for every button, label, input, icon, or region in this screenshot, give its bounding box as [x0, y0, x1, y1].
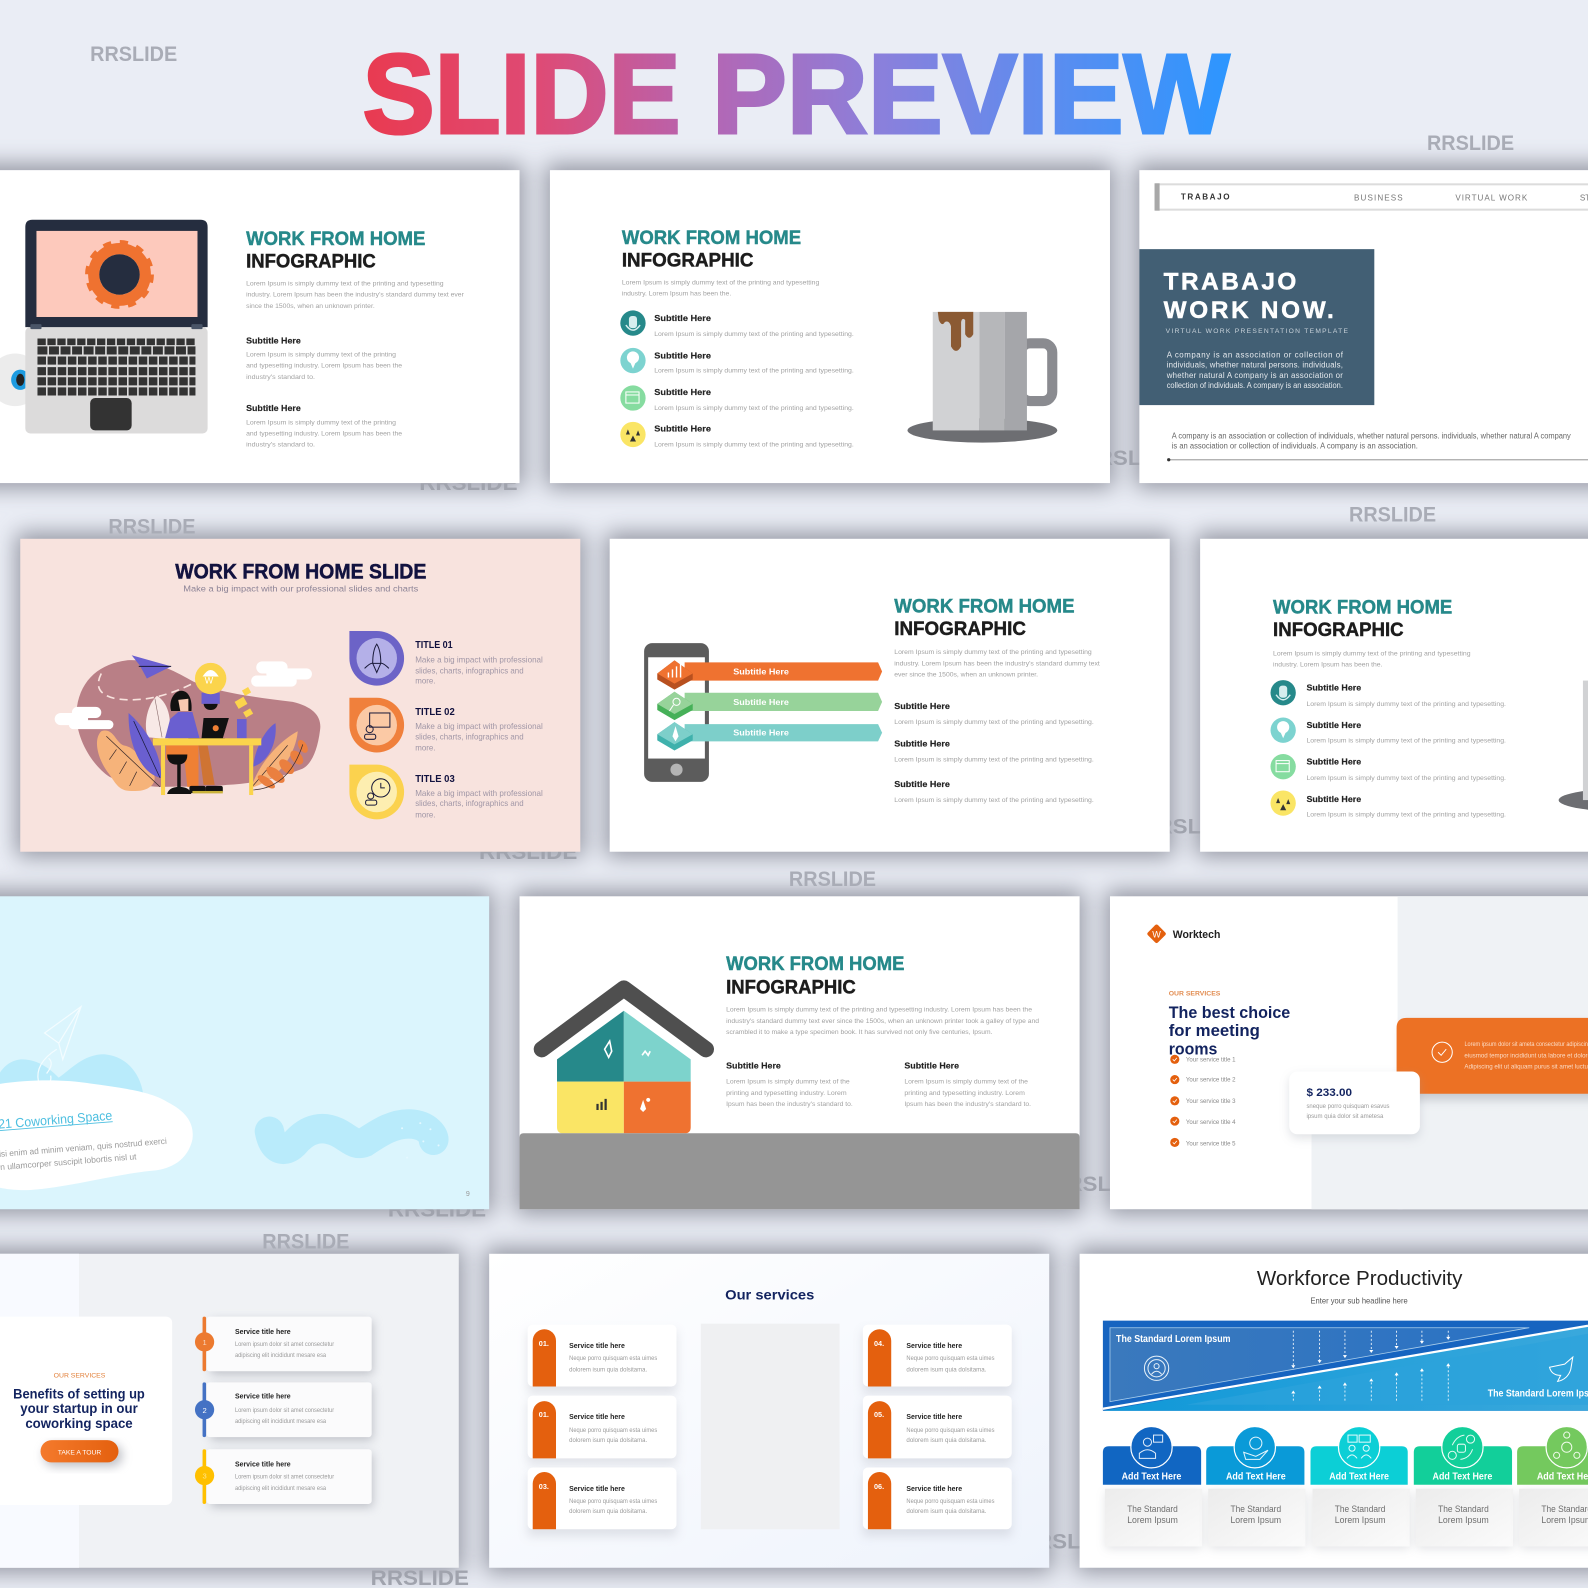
heading: Our services — [725, 1287, 814, 1303]
card: service 2: Lorem ipsum dolor sit amet consectetur — [235, 1407, 334, 1414]
icon: rocket badge — [349, 631, 404, 686]
list item four: Subtitle Here — [1306, 794, 1361, 804]
text block: intro: Lorem Ipsum is simply dummy text of the printing and typesetting — [894, 649, 1092, 656]
card: service 1 — [195, 1317, 373, 1374]
text block: intro: Lorem Ipsum is simply dummy text of the printing and typesetting — [246, 281, 444, 288]
text block: intro — [246, 281, 465, 310]
text block: subtitle left: printing and typesetting industry. Lorem — [726, 1090, 847, 1097]
text block: subtitles: Lorem Ipsum is simply dummy text of the printing and typesetting. — [894, 757, 1094, 764]
heading: INFOGRAPHIC — [246, 250, 376, 272]
card: add text 1: The Standard — [1127, 1504, 1178, 1515]
card: add text 1 — [1103, 1427, 1202, 1549]
card: add text 3 — [1311, 1427, 1410, 1549]
arrow: orange — [657, 660, 882, 690]
icon: laptop — [25, 220, 208, 433]
banner — [1103, 1321, 1588, 1411]
card: service 03: Service title here — [569, 1484, 625, 1493]
card: service 06: Service title here — [906, 1484, 962, 1493]
text block: subtitles: Lorem Ipsum is simply dummy text of the printing and typesetting. — [894, 797, 1094, 804]
title card: whether natural A company is an association or — [1166, 371, 1343, 380]
card: service 01 second: dolorem isum quia dolsitama. — [569, 1437, 647, 1444]
card: service 06 — [863, 1467, 1012, 1536]
watermarks: RRSLIDE — [1349, 503, 1436, 527]
card: service 01 second: 01. — [539, 1411, 549, 1419]
card: benefits: OUR SERVICES — [54, 1372, 106, 1379]
heading: coworking space: 21 Coworking Space — [0, 1108, 113, 1132]
watermarks: RRSLIDE — [108, 515, 195, 539]
watermarks: RRSLIDE — [1081, 446, 1179, 470]
card: add text 1: Lorem Ipsum — [1127, 1515, 1178, 1526]
text block: description: A company is an association or collection of individuals, whether natural persons. individuals, whether natural A company — [1172, 432, 1571, 441]
panel: laptop infographic slide — [0, 170, 520, 483]
card: service 1: adipiscing elit incididunt mesare esa — [235, 1352, 327, 1359]
icon: coffee mug cropped — [1559, 681, 1588, 812]
card: add text 3: Add Text Here — [1329, 1472, 1389, 1483]
text block: title 03: TITLE 03 — [415, 774, 455, 785]
text block: subtitles: Subtitle Here — [894, 779, 950, 789]
card: service 01: Service title here — [569, 1341, 625, 1350]
title: SLIDE — [363, 31, 681, 158]
title card: individuals, whether natural persons. individuals, — [1167, 361, 1343, 370]
text block: subtitle two: Lorem Ipsum is simply dummy text of the printing — [246, 419, 396, 426]
card: add text 4 — [1414, 1427, 1513, 1549]
card: service 04: Service title here — [906, 1341, 962, 1350]
card: service 04 — [863, 1325, 1012, 1394]
card: add text 2: The Standard — [1230, 1504, 1281, 1515]
watermarks: RRSLIDE — [90, 42, 177, 66]
text block: subtitles: Subtitle Here — [894, 701, 950, 711]
list item one — [1271, 680, 1506, 708]
list item three — [1271, 754, 1506, 782]
card: add text 2 — [1206, 1427, 1305, 1549]
heading — [1169, 1003, 1290, 1058]
card: service 2: adipiscing elit incididunt mesare esa — [235, 1418, 327, 1425]
list item four — [1271, 790, 1506, 818]
text block: subtitle two — [246, 403, 402, 449]
card: benefits: your startup in our — [20, 1401, 138, 1416]
text block: intro: Lorem Ipsum is simply dummy text of the printing and typesetting — [1273, 650, 1471, 657]
card: service 01 second: Neque porro quisquam esta uimes — [569, 1427, 657, 1434]
card: service 05: Service title here — [906, 1412, 962, 1421]
blob: white card — [0, 1080, 193, 1190]
blob: cloud behind — [0, 1054, 144, 1099]
card: service 3: adipiscing elit incididunt mesare esa — [235, 1485, 327, 1492]
callout: orange card: Adipiscing elit ut aliquam purus sit amet luctus — [1464, 1064, 1588, 1070]
panel: our services slide — [489, 1254, 1049, 1568]
callout: price card — [1289, 1071, 1420, 1138]
heading: WORK FROM HOME — [622, 227, 801, 249]
list: services: Your service title 3 — [1186, 1099, 1236, 1105]
title card: TRABAJO — [1164, 269, 1296, 296]
navigation bar: BUSINESS — [1354, 194, 1403, 203]
heading: WORK FROM HOME — [1273, 597, 1452, 619]
heading: Workforce Productivity — [1257, 1268, 1463, 1290]
card: service 01 second — [528, 1396, 677, 1464]
text block: title 02: Make a big impact with professional — [415, 722, 543, 731]
heading — [1257, 1268, 1463, 1305]
text block: subtitle one: industry's standard to. — [246, 374, 315, 381]
callout: price card: $ 233.00 — [1306, 1087, 1352, 1099]
logo: Worktech — [1173, 929, 1221, 941]
heading — [1273, 597, 1452, 641]
watermarks: RRSLIDE — [789, 867, 876, 891]
text block: subtitles: Subtitle Here — [894, 738, 950, 748]
text block: intro — [1273, 650, 1471, 668]
text block: description — [0, 1136, 168, 1172]
text block: intro — [622, 280, 820, 298]
text block: subtitle one: Subtitle Here — [246, 335, 301, 345]
list item four: Lorem Ipsum is simply dummy text of the printing and typesetting. — [1306, 811, 1506, 818]
heading: WORK FROM HOME SLIDE — [175, 559, 426, 583]
card: service 1: Lorem ipsum dolor sit amet consectetur — [235, 1341, 334, 1348]
text block: intro: scrambled it to make a type specimen book. It has survived not only five centuries, Ipsum. — [726, 1029, 993, 1036]
text block: title 01: Make a big impact with professional — [415, 655, 543, 664]
card: service 2: Service title here — [235, 1392, 291, 1401]
icon: clock badge — [349, 765, 404, 819]
text block: title 01: more. — [415, 677, 435, 686]
list item two — [1271, 718, 1506, 744]
panel: mug infographic slide — [550, 170, 1110, 483]
text block: intro: since the 1500s, when an unknown printer. — [246, 303, 375, 310]
text block: title 01 — [415, 640, 543, 686]
card: service 3: 3 — [202, 1472, 207, 1481]
heading: INFOGRAPHIC — [894, 618, 1026, 640]
callout: orange card — [1397, 1018, 1588, 1100]
navigation bar — [1155, 183, 1588, 211]
image placeholder — [701, 1324, 840, 1529]
banner: The Standard Lorem Ipsum — [1116, 1334, 1230, 1345]
card: service 04: dolorem isum quia dolsitama. — [906, 1366, 987, 1373]
card: add text 4: The Standard — [1438, 1504, 1489, 1515]
watermarks: RRSLIDE — [1020, 1530, 1118, 1554]
text block: subtitle right — [904, 1060, 1031, 1108]
eyebrow: OUR SERVICES — [1169, 991, 1221, 998]
icon: webcam behind laptop — [0, 353, 42, 406]
heading — [622, 227, 801, 271]
text block: subtitle one — [246, 335, 402, 381]
card: service 06: Neque porro quisquam esta uimes — [906, 1498, 995, 1505]
text block: title 03 — [415, 774, 543, 819]
card: service 3: Service title here — [235, 1459, 291, 1468]
title: PREVIEW — [712, 31, 1229, 158]
card: service 06: dolorem isum quia dolsitama. — [906, 1508, 987, 1515]
text block: subtitle two: Subtitle Here — [246, 403, 301, 413]
text block: intro: Lorem Ipsum is simply dummy text of the printing and typesetting industry. Lorem Ipsum has been the — [726, 1007, 1032, 1014]
card: benefits — [0, 1317, 172, 1505]
blob: squiggle — [269, 1122, 440, 1159]
text block: subtitles: Lorem Ipsum is simply dummy text of the printing and typesetting. — [894, 719, 1094, 726]
card: service 01: 01. — [539, 1340, 549, 1348]
card: add text 2: Add Text Here — [1226, 1472, 1286, 1483]
list: services: Your service title 5 — [1186, 1141, 1236, 1147]
text block: title 01: slides, charts, infographics and — [415, 666, 524, 675]
card: benefits: Benefits of setting up — [13, 1387, 145, 1402]
list item two — [620, 348, 854, 375]
list item two: Lorem Ipsum is simply dummy text of the printing and typesetting. — [654, 368, 854, 375]
arrow — [1167, 458, 1588, 461]
card: service 1: Service title here — [235, 1327, 291, 1336]
panel: mug infographic slide repeat — [1200, 539, 1588, 852]
logo — [1147, 924, 1221, 944]
heading: Enter your sub headline here — [1311, 1296, 1408, 1305]
text block: intro: industry. Lorem Ipsum has been the. — [1273, 661, 1383, 668]
text block: intro: Lorem Ipsum is simply dummy text of the printing and typesetting — [622, 280, 820, 287]
arrow: green — [657, 692, 882, 720]
card: add text 5 — [1517, 1427, 1588, 1549]
list item one — [620, 310, 854, 338]
card: add text 1: Add Text Here — [1122, 1472, 1182, 1483]
heading — [246, 228, 425, 272]
panel: work from home illustration slide — [20, 539, 580, 852]
floor — [520, 1133, 1080, 1209]
heading: rooms — [1169, 1039, 1217, 1058]
title card: collection of individuals. A company is an association. — [1167, 381, 1343, 390]
card: benefits: TAKE A TOUR — [58, 1450, 102, 1456]
card: service 04: 04. — [874, 1340, 884, 1348]
heading: WORK FROM HOME — [246, 228, 425, 250]
text block: intro: ever since the 1500s, when an unknown printer. — [894, 672, 1038, 679]
navigation bar: TRABAJO — [1181, 193, 1229, 202]
list item two: Lorem Ipsum is simply dummy text of the printing and typesetting. — [1306, 737, 1506, 744]
card: service 03: dolorem isum quia dolsitama. — [569, 1508, 647, 1515]
text block: subtitle right: printing and typesetting industry. Lorem — [904, 1090, 1025, 1097]
list item two: Subtitle Here — [1306, 720, 1361, 730]
list item three: Subtitle Here — [654, 387, 711, 397]
list item three — [620, 385, 854, 412]
card: service 1: 1 — [202, 1338, 207, 1347]
card: add text 4: Add Text Here — [1433, 1472, 1493, 1483]
arrow: green: Subtitle Here — [733, 697, 789, 707]
card: service 01 — [528, 1325, 677, 1394]
heading: INFOGRAPHIC — [1273, 619, 1404, 641]
icon: coffee mug — [907, 312, 1057, 443]
card: service 06: 06. — [874, 1483, 884, 1491]
list item one: Subtitle Here — [1306, 683, 1361, 693]
icon: house — [542, 988, 706, 1133]
text block: intro — [894, 649, 1100, 679]
card: service 03: Neque porro quisquam esta uimes — [569, 1498, 657, 1505]
list: services: Your service title 2 — [1186, 1078, 1236, 1084]
heading — [726, 953, 904, 999]
panel: house infographic slide — [520, 896, 1080, 1209]
logo: W — [1152, 929, 1161, 939]
icon: paper plane — [38, 1007, 81, 1090]
list item three: Lorem Ipsum is simply dummy text of the printing and typesetting. — [1306, 775, 1506, 782]
arrow: teal — [657, 722, 882, 750]
text block: intro — [726, 1007, 1039, 1036]
watermarks: RRSLIDE — [479, 840, 577, 864]
text block: title 03: Make a big impact with professional — [415, 789, 543, 798]
watermarks: RRSLIDE — [1050, 1172, 1148, 1196]
text block: title 03: more. — [415, 810, 435, 819]
watermarks: RRSLIDE — [1140, 814, 1239, 838]
watermarks: RRSLIDE — [419, 471, 518, 495]
card: service 03 — [528, 1467, 677, 1536]
watermarks: RRSLIDE — [1427, 131, 1514, 155]
heading: INFOGRAPHIC — [726, 977, 856, 999]
text block: subtitle right: Lorem Ipsum is simply dummy text of the — [904, 1079, 1028, 1086]
list item one: Subtitle Here — [654, 313, 711, 323]
text block: description: is an association or collection of individuals. A company is an association. — [1172, 442, 1418, 451]
panel: coworking space slide — [0, 896, 489, 1209]
panel: workforce productivity slide — [1080, 1254, 1588, 1568]
text block: subtitle two: and typesetting industry. Lorem Ipsum has been the — [246, 430, 402, 437]
text block: description — [1172, 432, 1571, 451]
title — [363, 31, 1229, 158]
text block: title 02: slides, charts, infographics and — [415, 732, 524, 741]
text block: subtitle left: Subtitle Here — [726, 1060, 781, 1070]
icon: phone — [644, 643, 709, 782]
list item four: Subtitle Here — [654, 423, 711, 433]
card: service 01: Neque porro quisquam esta uimes — [569, 1355, 657, 1362]
heading: WORK FROM HOME — [726, 953, 904, 975]
arrow: teal: Subtitle Here — [733, 727, 789, 737]
title card — [1139, 249, 1374, 405]
text block: title 03: slides, charts, infographics and — [415, 799, 524, 808]
callout: price card: sneque porro quisquam esavus — [1306, 1103, 1389, 1110]
card: service 05: dolorem isum quia dolsitama. — [906, 1437, 987, 1444]
list item three: Lorem Ipsum is simply dummy text of the printing and typesetting. — [654, 405, 854, 412]
card: service 01: dolorem isum quia dolsitama. — [569, 1366, 647, 1373]
card: service 05: Neque porro quisquam esta uimes — [906, 1427, 995, 1434]
callout: price card: ipsum quia dolor sit ametesa — [1306, 1113, 1384, 1120]
text block: subtitle left: Ipsum has been the industry's standard to. — [726, 1101, 853, 1108]
heading: Make a big impact with our professional slides and charts — [183, 583, 419, 593]
text block: subtitles — [894, 701, 1094, 804]
list: services — [1170, 1055, 1236, 1147]
card: service 3: Lorem ipsum dolor sit amet consectetur — [235, 1474, 334, 1481]
list item four — [620, 422, 854, 449]
text block: description: n ullamcorper suscipit lobortis nisl ut — [0, 1151, 137, 1172]
card: add text 4: Lorem Ipsum — [1438, 1515, 1489, 1526]
text block: subtitle one: and typesetting industry. Lorem Ipsum has been the — [246, 363, 402, 370]
text block: description: isi enim ad minim veniam, quis nostrud exerci — [0, 1136, 167, 1159]
text block: subtitle left — [726, 1060, 853, 1108]
card: service 3 — [195, 1449, 373, 1507]
card: service 05 — [863, 1396, 1012, 1464]
heading: The best choice — [1169, 1003, 1290, 1022]
list item three: Subtitle Here — [1306, 757, 1361, 767]
heading — [175, 559, 426, 593]
text block: intro: industry. Lorem Ipsum has been the industry's standard dummy text ever — [246, 292, 465, 299]
card: service 2 — [195, 1382, 373, 1440]
text block: intro: industry. Lorem Ipsum has been the industry's standard dummy text — [894, 660, 1100, 667]
text block: subtitle right: Ipsum has been the industry's standard to. — [904, 1101, 1031, 1108]
card: benefits: coworking space — [25, 1416, 133, 1431]
title card: VIRTUAL WORK PRESENTATION TEMPLATE — [1166, 328, 1349, 335]
arrow: orange: Subtitle Here — [733, 666, 789, 676]
heading: for meeting — [1169, 1021, 1260, 1040]
icon: presentation badge — [349, 698, 404, 752]
panel: worktech slide — [1110, 896, 1588, 1209]
card: add text 3: Lorem Ipsum — [1335, 1515, 1386, 1526]
panel: phone infographic slide — [610, 539, 1170, 852]
illustration: person working at desk: W — [205, 676, 214, 686]
navigation bar: VIRTUAL WORK — [1455, 194, 1528, 203]
card: service 04: Neque porro quisquam esta uimes — [906, 1355, 995, 1362]
title card: WORK NOW. — [1164, 297, 1334, 324]
page number: 9 — [466, 1190, 470, 1198]
panel: benefits slide — [0, 1254, 459, 1568]
card: add text 3: The Standard — [1335, 1504, 1385, 1515]
card: service 05: 05. — [874, 1411, 884, 1419]
watermarks: RRSLIDE — [262, 1230, 349, 1254]
text block: title 02 — [415, 707, 543, 752]
text block: intro: industry. Lorem Ipsum has been the. — [622, 291, 731, 298]
heading: INFOGRAPHIC — [622, 249, 753, 271]
card: service 2: 2 — [202, 1406, 207, 1415]
text block: intro: industry's standard dummy text ever since the 1500s, when an unknown printer took a galley of type and — [726, 1018, 1039, 1025]
callout: orange card: eiusmod tempor incididunt uta labore et dolore — [1464, 1053, 1588, 1059]
watermarks: RRSLIDE — [388, 1197, 486, 1221]
list item two: Subtitle Here — [654, 351, 711, 361]
text block: title 01: TITLE 01 — [415, 640, 453, 651]
card: service 03: 03. — [539, 1483, 549, 1491]
list: services: Your service title 4 — [1186, 1120, 1236, 1126]
title card: A company is an association or collection of — [1167, 351, 1344, 360]
list item four: Lorem Ipsum is simply dummy text of the printing and typesetting. — [654, 442, 854, 449]
text block: subtitle left: Lorem Ipsum is simply dummy text of the — [726, 1079, 850, 1086]
panel: trabajo slide — [1139, 170, 1588, 483]
card: add text 2: Lorem Ipsum — [1230, 1515, 1281, 1526]
list: services: Your service title 1 — [1186, 1057, 1236, 1063]
card: service 01 second: Service title here — [569, 1412, 625, 1421]
text block: title 02: TITLE 02 — [415, 707, 455, 718]
text block: subtitle right: Subtitle Here — [904, 1060, 959, 1070]
text block: subtitle one: Lorem Ipsum is simply dummy text of the printing — [246, 351, 396, 358]
illustration: person working at desk — [55, 655, 320, 795]
list item one: Lorem Ipsum is simply dummy text of the printing and typesetting. — [1306, 701, 1506, 708]
list item one: Lorem Ipsum is simply dummy text of the printing and typesetting. — [654, 331, 854, 338]
heading: WORK FROM HOME — [894, 596, 1075, 618]
text block: subtitle two: industry's standard to. — [246, 442, 315, 449]
heading — [894, 596, 1075, 640]
text block: title 02: more. — [415, 743, 435, 752]
